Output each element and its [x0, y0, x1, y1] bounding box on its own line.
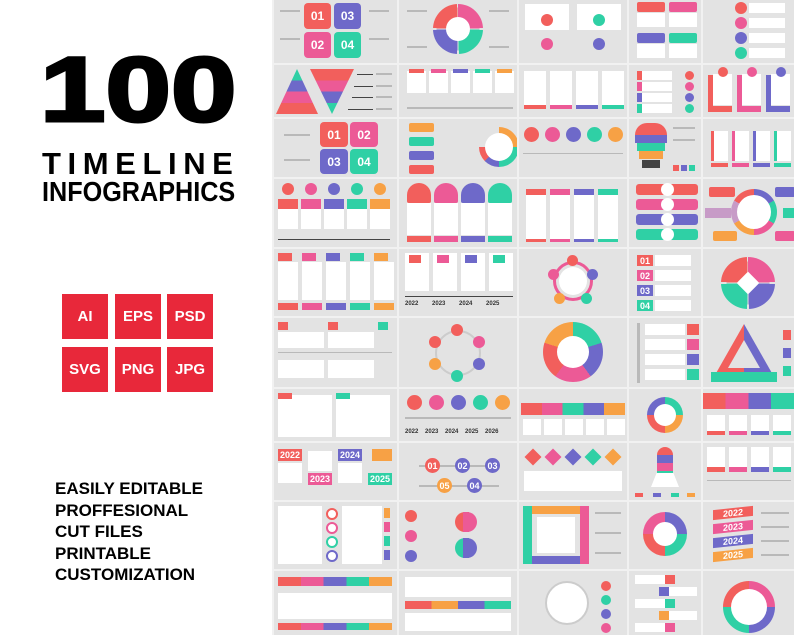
- tile: diamonds: [519, 443, 627, 500]
- tile: snake timeline: 02: [457, 460, 468, 470]
- tile: square frame: [519, 502, 627, 569]
- badge AI: AI: [78, 308, 92, 325]
- tile: chevron row: [519, 389, 627, 441]
- tile: ribbons: 2024: [723, 535, 743, 547]
- badge PNG: [115, 347, 161, 392]
- tile: year cards: 2022 2023 2024 2025: [405, 301, 499, 307]
- tile: circle of circles: [399, 318, 517, 387]
- feature list: [55, 479, 203, 584]
- tile: map pins: [519, 119, 627, 177]
- feature list: PRINTABLE: [55, 544, 151, 563]
- tile: light bulb: [629, 119, 701, 177]
- tile: middle color bar: [399, 571, 517, 635]
- tile: 4 notched squares: 04: [357, 154, 371, 168]
- tile: year blocks: 2025: [370, 474, 390, 484]
- tile: 4 notched squares: 03: [327, 154, 341, 168]
- tile: 5 year circles: [399, 389, 517, 441]
- tile: two cards: [274, 389, 397, 441]
- feature list: CUT FILES: [55, 522, 143, 541]
- tile: pyramids: [274, 65, 397, 117]
- tile: 4 squares: 04: [341, 38, 354, 52]
- tile: numbered list 2: 01: [640, 256, 650, 266]
- tile: triangle: [703, 318, 794, 387]
- tile: circle with arrows: [629, 389, 701, 441]
- feature list: EASILY EDITABLE: [55, 479, 203, 498]
- tile: 4 boxes: [629, 0, 701, 63]
- tile: 4 notched squares: 02: [357, 128, 371, 142]
- badge SVG: SVG: [69, 361, 101, 378]
- tile: ribbons: 2023: [723, 521, 743, 533]
- badge PNG: PNG: [122, 361, 154, 378]
- tile: 5 columns: [274, 249, 397, 316]
- title: INFOGRAPHICS: INFOGRAPHICS: [42, 176, 235, 207]
- tile: 4 bordered cards: [703, 119, 794, 177]
- tile: title cards: [519, 0, 627, 63]
- tile: ribbons: 2025: [723, 549, 743, 561]
- tile: hexagon ring: [703, 179, 794, 247]
- tile: ring: [703, 571, 794, 635]
- tile: 4 squares: 01: [311, 9, 324, 23]
- tile: cards with bars: [519, 65, 627, 117]
- tile: 5 step cards: [274, 179, 397, 247]
- tile: 4 header cards: [519, 179, 627, 247]
- tile: pentagon: [519, 249, 627, 316]
- tile: 4 squares: 02: [311, 38, 324, 52]
- tile: L brackets: [703, 65, 794, 117]
- tile: year blocks: [274, 443, 397, 500]
- badge PSD: PSD: [175, 308, 205, 325]
- tile: snake timeline: 01: [427, 460, 438, 470]
- badge JPG: [167, 347, 213, 392]
- tile: hexagon with circles: [519, 571, 627, 635]
- tile: snake timeline: 03: [487, 460, 498, 470]
- tile: numbered list 2: [629, 249, 701, 316]
- format badges: [62, 294, 213, 392]
- tile: 4 notched squares: [274, 119, 397, 177]
- badge JPG: JPG: [175, 361, 205, 378]
- tile: snake timeline: 05: [439, 480, 450, 490]
- tile: 4 notched squares: 01: [327, 128, 341, 142]
- tile: year blocks: 2022: [280, 450, 300, 460]
- tile: rocket: [629, 443, 701, 500]
- tile: 5 cards: [399, 65, 517, 117]
- tile: timeline cards: [274, 318, 397, 387]
- title: 100: 100: [40, 39, 236, 141]
- tile: 4 hat cards: [399, 179, 517, 247]
- tile: donut: [399, 0, 517, 63]
- tile: pills and ring: [399, 119, 517, 177]
- feature list: PROFFESIONAL: [55, 501, 188, 520]
- tile: top colored timeline: [274, 571, 397, 635]
- tile: cards on timeline: [703, 443, 794, 500]
- title: TIMELINE: TIMELINE: [42, 146, 239, 181]
- tile: numbered list 2: 02: [640, 270, 650, 280]
- tile: numbered list 2: 03: [640, 286, 650, 296]
- tile: zigzag list: [629, 571, 701, 635]
- tile: central numbered list: [274, 502, 397, 569]
- badge EPS: [115, 294, 161, 339]
- tile: snake timeline: [399, 443, 517, 500]
- tile: big donut: [519, 318, 627, 387]
- tile: 4 squares: [274, 0, 397, 63]
- tile: 5 year circles: 2022 2023 2024 2025 2026: [405, 429, 498, 435]
- tile: 4 squares: 03: [341, 9, 354, 23]
- tile: numbered list 2: 04: [640, 300, 650, 310]
- tile: snake timeline: 04: [469, 480, 480, 490]
- tile: vertical timeline: [629, 318, 701, 387]
- badge SVG: [62, 347, 108, 392]
- tile: year blocks: 2023: [310, 474, 330, 484]
- tile: pills with circles: [629, 179, 701, 247]
- tile: ribbons: 2022: [723, 507, 743, 519]
- badge EPS: EPS: [123, 308, 153, 325]
- tile: numbered list: [703, 0, 794, 63]
- tile: circles and halves: [399, 502, 517, 569]
- tile: 4 petals: [703, 249, 794, 316]
- tile: chevrons and cards: [703, 389, 794, 441]
- feature list: CUSTOMIZATION: [55, 565, 195, 584]
- badge AI: [62, 294, 108, 339]
- tile: ribbons: [703, 502, 794, 569]
- tile: tab list: [629, 65, 701, 117]
- tile: 4 leaf petals: [629, 502, 701, 569]
- grid background: [272, 0, 794, 635]
- tile: year blocks: 2024: [340, 450, 360, 460]
- tile: year cards: [399, 249, 517, 316]
- badge PSD: [167, 294, 213, 339]
